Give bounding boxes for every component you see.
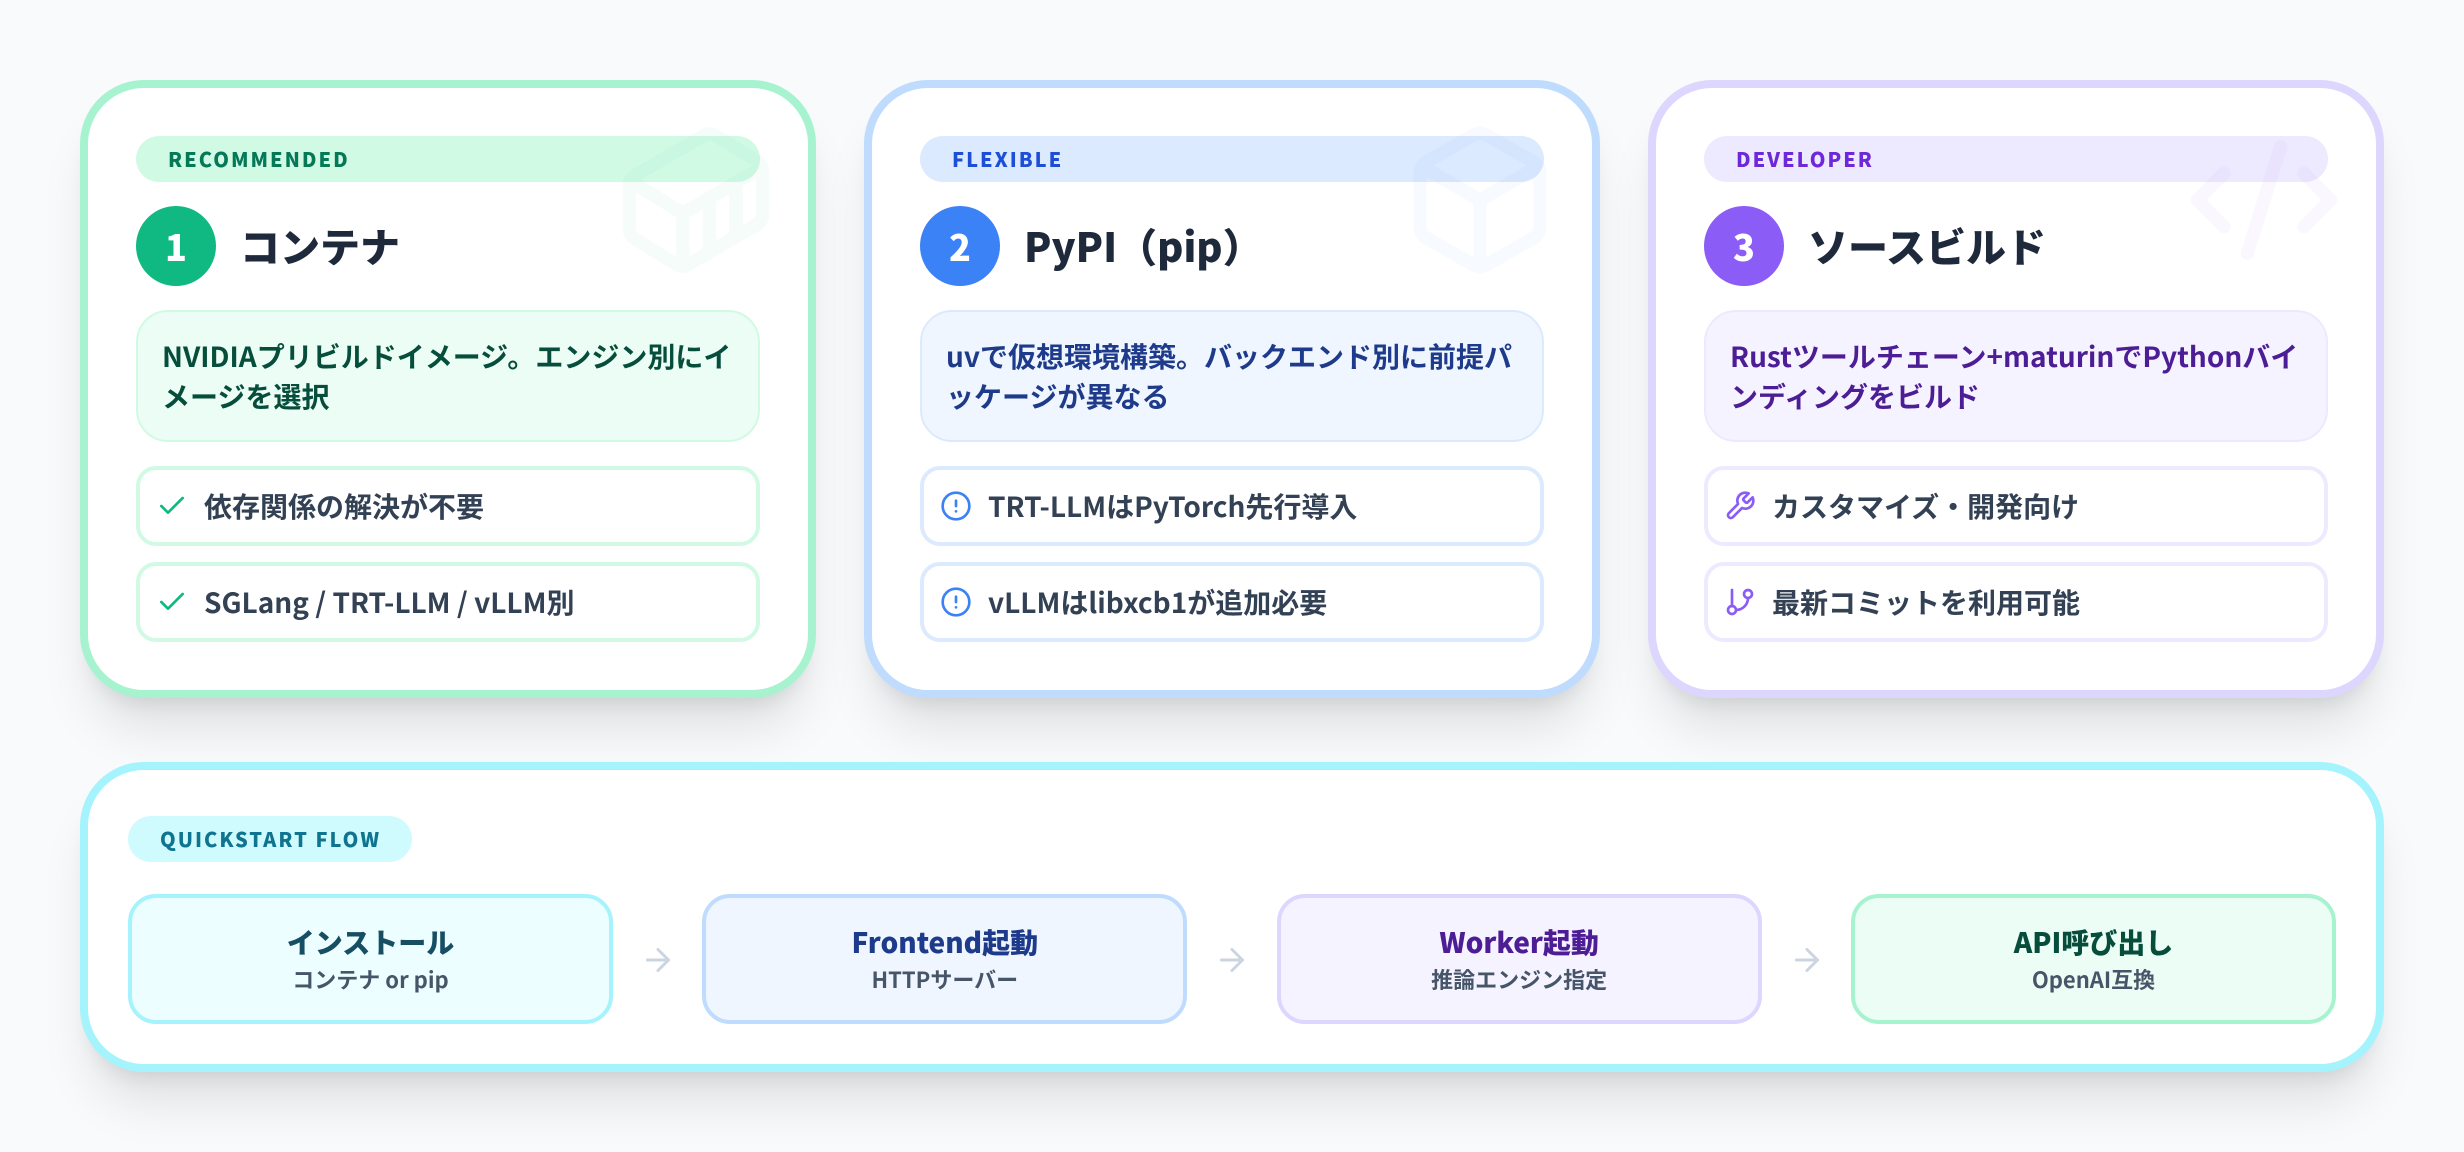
heading: source build: ソースビルド	[1808, 216, 2046, 274]
number badge 1: 1	[165, 220, 187, 272]
badge: flexible: FLEXIBLE	[952, 144, 1063, 173]
description: source build	[1704, 310, 2328, 442]
badge: developer: DEVELOPER	[1736, 144, 1874, 173]
panel: container install	[80, 80, 816, 698]
panel: quickstart flow	[80, 762, 2384, 1072]
list item: engine variants: SGLang / TRT-LLM / vLLM別	[204, 582, 574, 622]
list item: latest commit	[1704, 562, 2328, 642]
panel: PyPI install	[864, 80, 1600, 698]
arrow: worker to API	[1795, 948, 1819, 972]
flow step: frontend: Frontend起動	[852, 922, 1038, 962]
panel: source build	[1648, 80, 2384, 698]
list item: TRT-LLM prerequisite: TRT-LLMはPyTorch先行導入	[988, 486, 1357, 526]
heading: PyPI: PyPI（pip）	[1024, 216, 1263, 274]
list item: vLLM prerequisite: vLLMはlibxcb1が追加必要	[988, 582, 1327, 622]
list item: customization: カスタマイズ・開発向け	[1772, 486, 2079, 526]
badge: recommended: RECOMMENDED	[168, 144, 350, 173]
description: source build: ンディングをビルド	[1730, 376, 1980, 416]
description: PyPI: uvで仮想環境構築。バックエンド別に前提パ	[946, 336, 1512, 376]
arrow: install to frontend	[646, 948, 670, 972]
badge: recommended	[136, 136, 760, 182]
number badge 3: 3	[1733, 220, 1755, 272]
list item: vLLM prerequisite	[920, 562, 1544, 642]
number badge 1	[136, 206, 216, 286]
number badge 2: 2	[949, 220, 971, 272]
description: container	[136, 310, 760, 442]
flow step: install	[128, 894, 613, 1024]
heading: container: コンテナ	[240, 216, 400, 274]
badge: quickstart flow	[128, 816, 412, 862]
flow step: API call: API呼び出し	[2014, 922, 2173, 962]
flow step: install: インストール	[287, 922, 454, 962]
description: container: メージを選択	[162, 376, 329, 416]
flow step: frontend: HTTPサーバー	[872, 963, 1018, 995]
flow step: worker	[1277, 894, 1762, 1024]
flow step: API call	[1851, 894, 2336, 1024]
flow step: install: コンテナ or pip	[292, 963, 449, 995]
description: PyPI	[920, 310, 1544, 442]
icon: code watermark	[2184, 120, 2344, 280]
flow step: worker: 推論エンジン指定	[1431, 963, 1607, 995]
list item: customization	[1704, 466, 2328, 546]
list item: TRT-LLM prerequisite	[920, 466, 1544, 546]
list item: no dependency resolution	[136, 466, 760, 546]
flow step: frontend	[702, 894, 1187, 1024]
description: PyPI: ッケージが異なる	[946, 376, 1169, 416]
flow step: worker: Worker起動	[1439, 922, 1599, 962]
list item: engine variants	[136, 562, 760, 642]
icon: box watermark	[1400, 120, 1560, 280]
list item: no dependency resolution: 依存関係の解決が不要	[204, 486, 484, 526]
number badge 3	[1704, 206, 1784, 286]
badge: quickstart flow: QUICKSTART FLOW	[160, 824, 381, 853]
arrow: frontend to worker	[1220, 948, 1244, 972]
number badge 2	[920, 206, 1000, 286]
list item: latest commit: 最新コミットを利用可能	[1772, 582, 2080, 622]
badge: flexible	[920, 136, 1544, 182]
badge: developer	[1704, 136, 2328, 182]
description: source build: Rustツールチェーン+maturinでPythonバイ	[1730, 336, 2298, 376]
flow step: API call: OpenAI互換	[2032, 963, 2155, 995]
icon: container watermark	[623, 128, 769, 272]
description: container: NVIDIAプリビルドイメージ。エンジン別にイ	[162, 336, 731, 376]
